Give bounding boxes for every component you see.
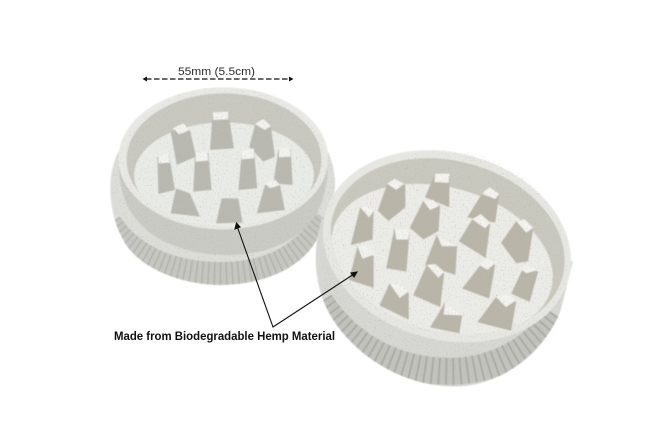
left grinder: inner wall <box>127 93 321 227</box>
left grinder: base <box>110 143 335 285</box>
dimension label <box>142 66 294 82</box>
right grinder: floor <box>331 183 554 335</box>
right grinder: teeth <box>349 174 538 333</box>
right grinder: inner wall <box>311 133 585 360</box>
right grinder <box>315 150 573 387</box>
left grinder: teeth <box>157 113 293 223</box>
dimension arrow <box>142 76 294 82</box>
left grinder: knurled ribs <box>110 220 327 274</box>
dimension text: 55mm (5.5cm) <box>178 66 255 78</box>
right grinder: knurled ribs <box>320 302 557 371</box>
callout text: Made from Biodegradable Hemp Material <box>114 329 335 343</box>
material speckle <box>111 87 568 380</box>
right grinder: rim <box>301 123 593 369</box>
left grinder: wall <box>118 153 328 255</box>
left grinder <box>110 87 335 285</box>
left grinder: rim <box>118 87 328 229</box>
callout arrows <box>235 223 357 327</box>
left grinder: floor <box>134 122 314 228</box>
right grinder: base <box>316 218 573 387</box>
